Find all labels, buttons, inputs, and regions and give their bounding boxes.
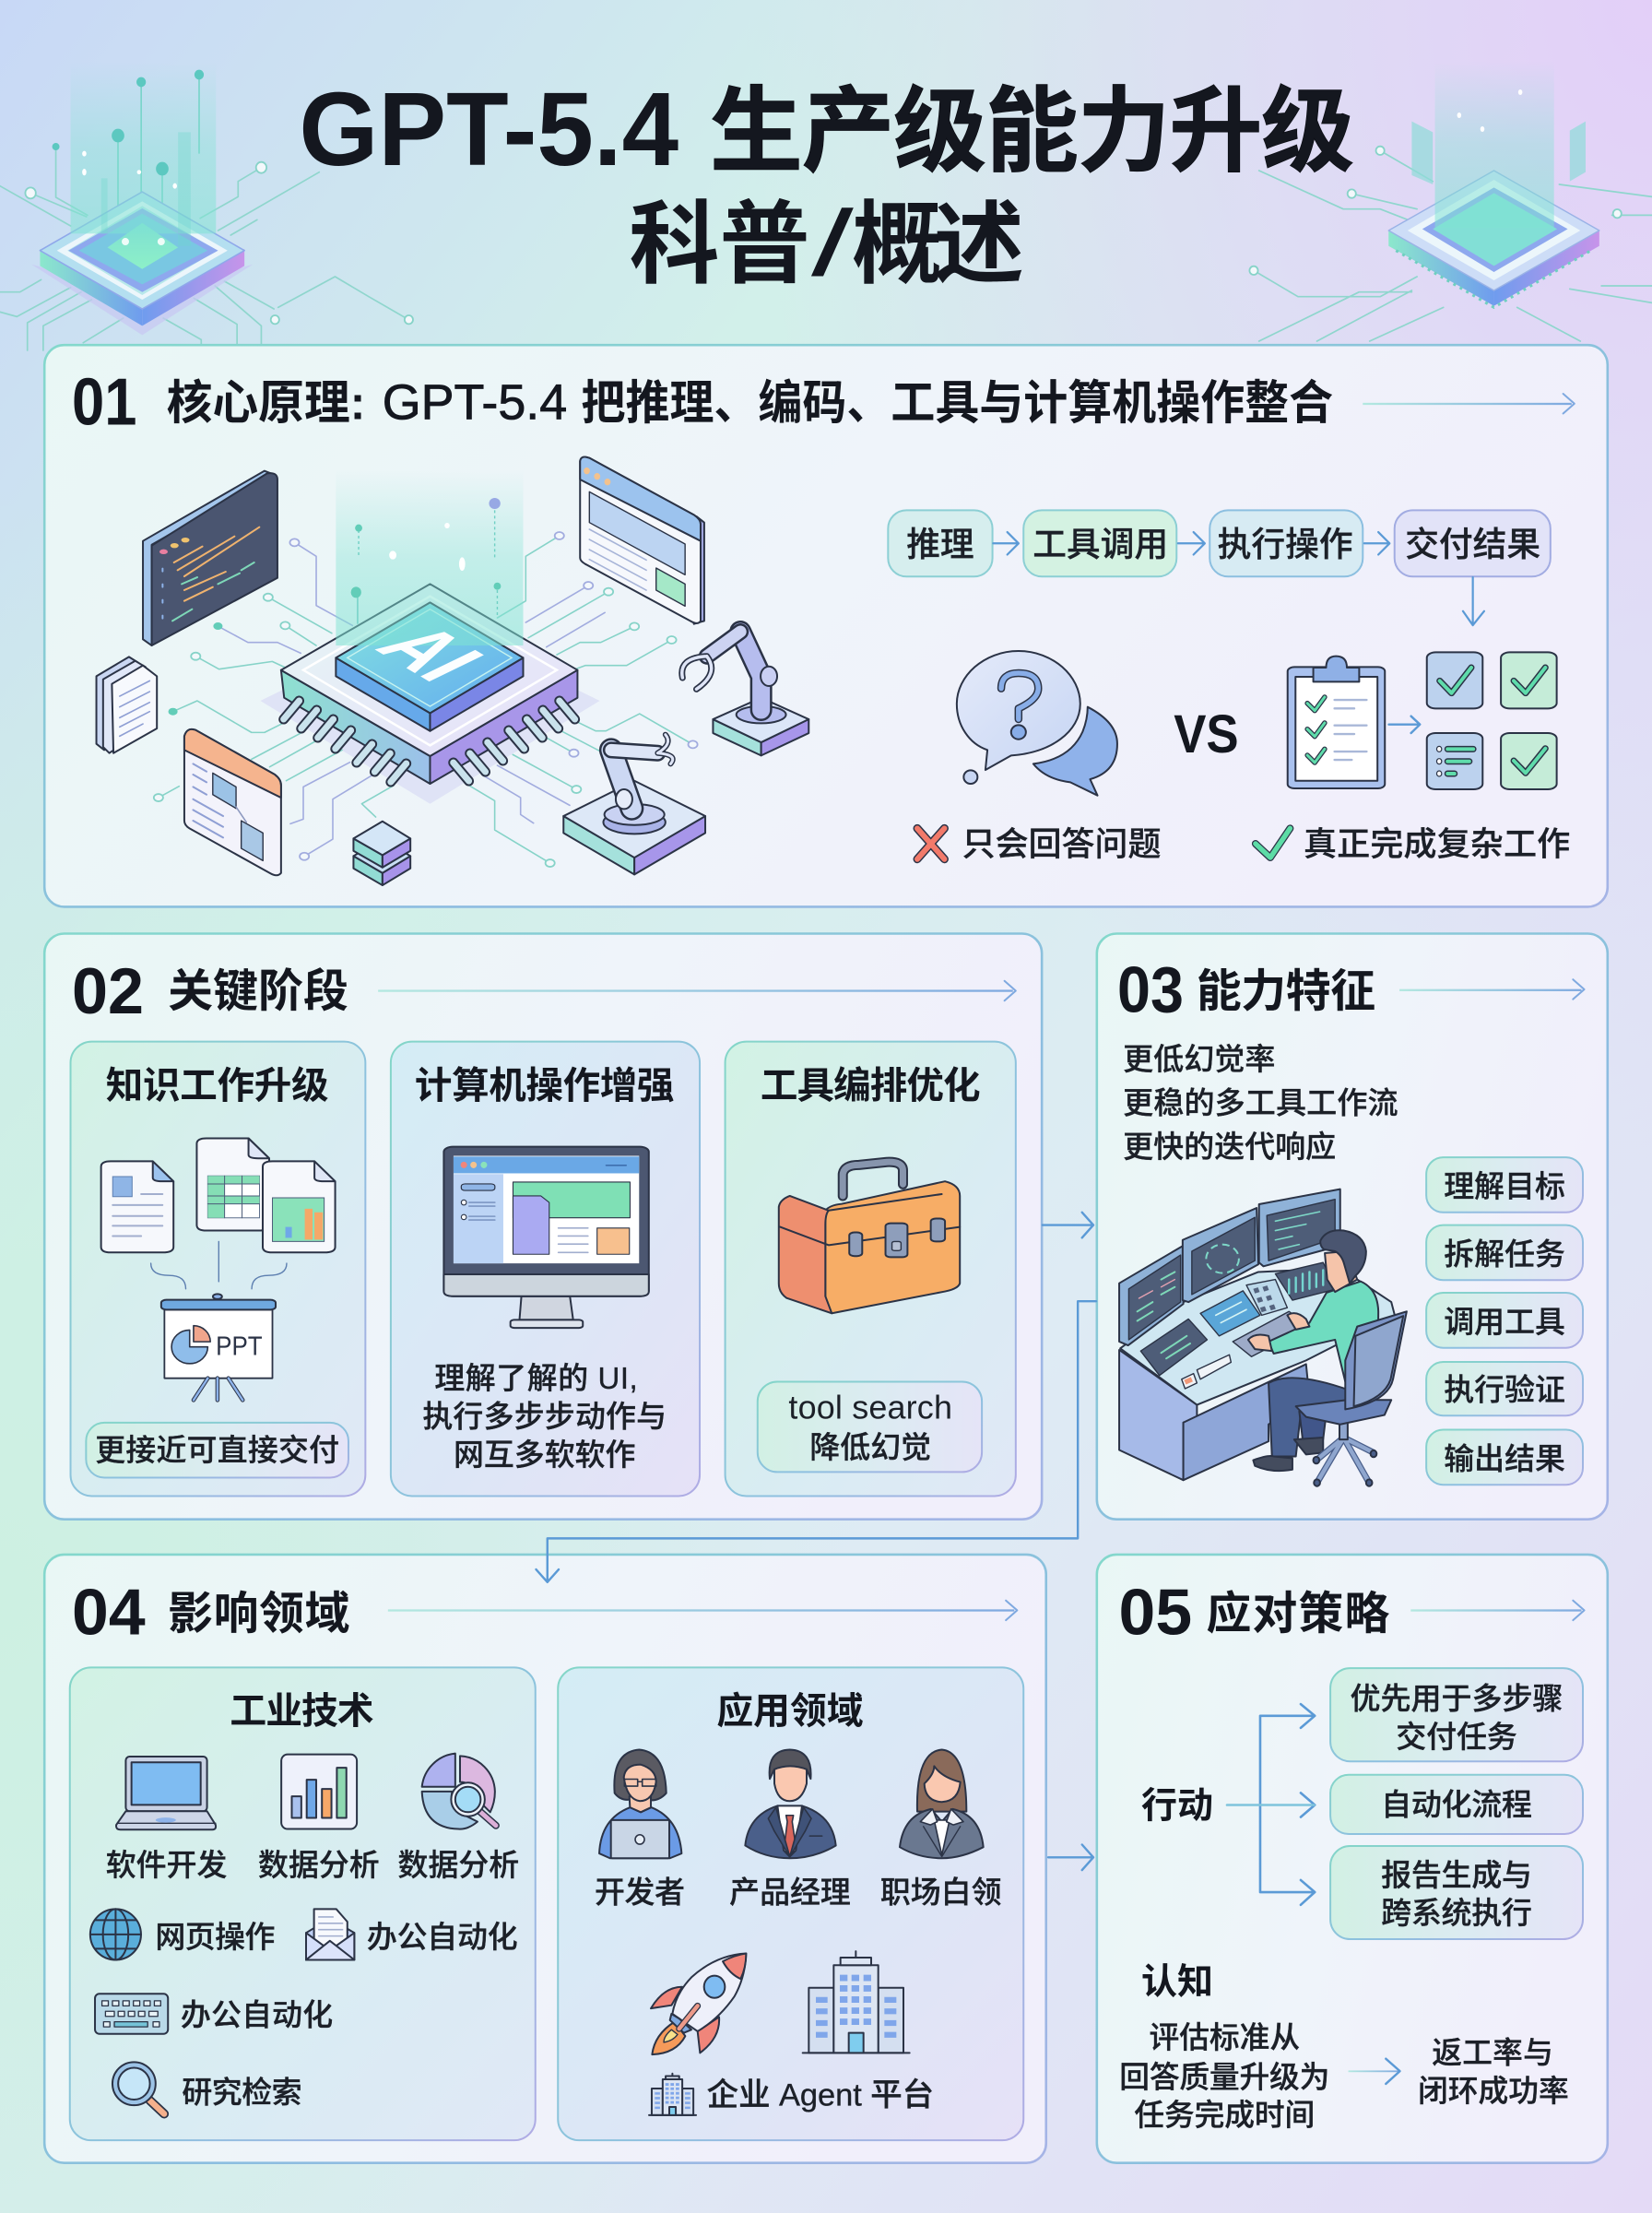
comparison icons <box>917 651 1557 859</box>
arrow <box>1349 2059 1400 2084</box>
text: features: 更稳的多工具工作流 <box>1123 1087 1398 1121</box>
heading: 01: 01 <box>72 366 136 440</box>
card title: 工业技术 <box>230 1691 374 1732</box>
icon: laptop <box>116 1757 216 1829</box>
decoration: left chip with circuit traces <box>0 62 413 350</box>
pill: direct delivery <box>86 1423 348 1478</box>
icon: documents to ppt <box>101 1139 336 1400</box>
heading: 05: 应对策略 <box>1206 1589 1389 1639</box>
title <box>299 70 1354 295</box>
labels: tech: 办公自动化 <box>181 1997 333 2031</box>
icon: speech bubbles <box>957 651 1117 796</box>
text: vs: VS <box>1174 704 1239 764</box>
label: cognition: 认知 <box>1141 1963 1213 2003</box>
step: reasoning: 推理 <box>906 526 974 563</box>
step: execute <box>1210 510 1363 576</box>
icon: robot arm right <box>682 632 808 755</box>
pill: tool search: 降低幻觉 <box>809 1430 931 1464</box>
heading: 01: 核心原理: <box>167 377 365 430</box>
illustration: operator at console <box>1119 1189 1407 1486</box>
pills: actions: 报告生成与 <box>1381 1859 1532 1893</box>
icon: data stack <box>353 822 410 885</box>
heading: 05 <box>1119 1575 1585 1648</box>
card: tool orchestration <box>726 1042 1016 1496</box>
card: industry tech <box>70 1667 536 2140</box>
step: tool call: 工具调用 <box>1032 526 1168 563</box>
icons: roles <box>599 1749 984 2115</box>
heading: 03: 03 <box>1117 953 1184 1025</box>
step: execute: 执行操作 <box>1218 526 1353 563</box>
pills: actions <box>1330 1668 1583 1939</box>
pills: actions: 跨系统执行 <box>1381 1897 1532 1931</box>
labels: roles: 产品经理 <box>729 1875 851 1909</box>
card: computer operation <box>391 1042 700 1496</box>
text: description: 理解了解的 UI, <box>434 1361 638 1395</box>
illustration: AI chip with tools <box>97 457 808 885</box>
pill: direct delivery: 更接近可直接交付 <box>95 1433 339 1467</box>
text: evaluation standard: 任务完成时间 <box>1134 2098 1315 2132</box>
icon: orange window <box>184 729 281 875</box>
text: rework and closure: 闭环成功率 <box>1418 2074 1569 2108</box>
text: description: 网互多软软作 <box>454 1438 635 1472</box>
heading: 05: 05 <box>1119 1575 1192 1648</box>
arrow <box>1389 716 1420 733</box>
pills: process steps: 调用工具 <box>1444 1305 1565 1339</box>
panel: 05 strategy <box>1097 1555 1608 2163</box>
icon: office building <box>803 1951 910 2053</box>
icon: mail <box>306 1909 354 1959</box>
icon: bar chart <box>281 1755 357 1829</box>
circuit traces <box>154 532 698 867</box>
text: only answers: 只会回答问题 <box>962 825 1161 863</box>
text: description: 执行多步步动作与 <box>422 1399 667 1433</box>
text: ppt: PPT <box>216 1331 263 1361</box>
icon: task tiles <box>1427 652 1557 789</box>
icon: cross <box>917 828 944 859</box>
text: features: 更低幻觉率 <box>1123 1043 1275 1077</box>
text: features: 更快的迭代响应 <box>1123 1130 1336 1165</box>
heading: 02 <box>72 954 1016 1027</box>
labels: tech: 网页操作 <box>155 1920 275 1954</box>
heading: 01: GPT-5.4 <box>383 376 567 431</box>
labels: tech: 数据分析 <box>258 1848 380 1882</box>
card: knowledge work <box>71 1042 365 1496</box>
text: evaluation standard <box>1119 2020 1329 2132</box>
heading: 02: 02 <box>72 954 144 1027</box>
icons: tech <box>90 1754 496 2113</box>
text: rework and closure <box>1418 2036 1569 2108</box>
pills: process steps: 理解目标 <box>1444 1169 1565 1203</box>
heading: 03: 能力特征 <box>1197 966 1375 1016</box>
icon: toolbox <box>779 1162 960 1313</box>
title: 科普 <box>630 193 809 294</box>
step: deliver <box>1395 510 1551 576</box>
heading: 02: 关键阶段 <box>168 966 348 1016</box>
icon: robot arm lower <box>563 735 705 874</box>
panel: 04 impact areas <box>44 1555 1046 2163</box>
connector: 02 to 03 <box>1043 1213 1093 1237</box>
icon: donut magnifier <box>422 1754 496 1829</box>
pills: process steps: 执行验证 <box>1444 1372 1565 1406</box>
text: completes work: 真正完成复杂工作 <box>1304 825 1570 863</box>
text: rework and closure: 返工率与 <box>1432 2036 1553 2070</box>
heading: 04 <box>72 1575 1017 1648</box>
title: / <box>811 192 855 295</box>
card title: 知识工作升级 <box>106 1064 329 1106</box>
labels: tech <box>106 1848 519 2110</box>
icon: office worker <box>900 1749 984 1858</box>
panel: 01 core principle <box>44 345 1608 906</box>
connector: 03 to 04 <box>537 1301 1096 1582</box>
icon: rocket <box>651 1954 746 2054</box>
heading: 04: 04 <box>72 1575 146 1648</box>
labels: tech: 办公自动化 <box>367 1920 518 1954</box>
central chip <box>281 584 577 784</box>
icon: browser window <box>580 457 704 624</box>
pills: actions: 交付任务 <box>1396 1721 1517 1755</box>
icon: monitor <box>443 1147 649 1328</box>
title: 概述 <box>852 193 1024 294</box>
label: action: 行动 <box>1141 1786 1213 1826</box>
step: tool call <box>1023 510 1176 576</box>
decoration: right chip with circuit traces <box>1249 62 1652 341</box>
text: evaluation standard: 评估标准从 <box>1149 2020 1300 2054</box>
card title: 计算机操作增强 <box>415 1064 674 1106</box>
label: enterprise agent platform: 企业 Agent 平台 <box>707 2078 934 2113</box>
title: GPT-5.4 <box>299 70 678 187</box>
branching arrows <box>1227 1704 1315 1905</box>
icon: clipboard <box>1288 657 1385 788</box>
pill: tool search <box>758 1381 982 1472</box>
chip label: AI: AI <box>356 614 504 692</box>
title: 生产级能力升级 <box>710 81 1354 184</box>
step: reasoning <box>888 510 993 576</box>
pills: actions: 优先用于多步骤 <box>1351 1683 1564 1717</box>
text: evaluation standard: 回答质量升级为 <box>1119 2060 1329 2094</box>
icon: magnifier <box>112 2062 164 2113</box>
icon: keyboard <box>95 1994 168 2034</box>
flow: steps <box>888 510 1551 625</box>
card title: 应用领域 <box>716 1691 864 1732</box>
heading: 04: 影响领域 <box>168 1589 350 1639</box>
icon: globe <box>90 1909 141 1959</box>
panel: 02 key stages <box>44 933 1042 1520</box>
pills: process steps: 输出结果 <box>1444 1441 1565 1475</box>
pills: process steps <box>1426 1157 1583 1485</box>
labels: tech: 数据分析 <box>398 1848 519 1882</box>
text: description <box>422 1361 667 1472</box>
step: deliver: 交付结果 <box>1405 526 1540 563</box>
icon: developer <box>599 1749 681 1858</box>
panel: 03 capability <box>1097 933 1608 1520</box>
heading: 01 <box>72 366 1575 440</box>
heading: 01: 把推理、编码、工具与计算机操作整合 <box>581 377 1333 430</box>
icon: product manager <box>745 1749 836 1858</box>
labels: roles: 开发者 <box>595 1875 685 1909</box>
card title: 工具编排优化 <box>761 1064 981 1106</box>
card: application areas <box>558 1667 1023 2140</box>
pills: actions: 自动化流程 <box>1381 1788 1532 1822</box>
icon: document stack <box>97 657 157 753</box>
text: features <box>1123 1043 1398 1165</box>
labels: roles <box>595 1875 1002 1909</box>
icon: code panel <box>143 471 277 645</box>
labels: roles: 职场白领 <box>880 1875 1002 1909</box>
labels: tech: 软件开发 <box>106 1848 227 1882</box>
pills: process steps: 拆解任务 <box>1444 1237 1565 1271</box>
icon: small building <box>649 2074 696 2115</box>
pill: tool search: tool search <box>788 1388 952 1426</box>
heading: 03 <box>1117 953 1585 1025</box>
labels: tech: 研究检索 <box>182 2076 301 2110</box>
icon: check <box>1256 828 1290 858</box>
connector: 04 to 05 <box>1048 1845 1093 1870</box>
